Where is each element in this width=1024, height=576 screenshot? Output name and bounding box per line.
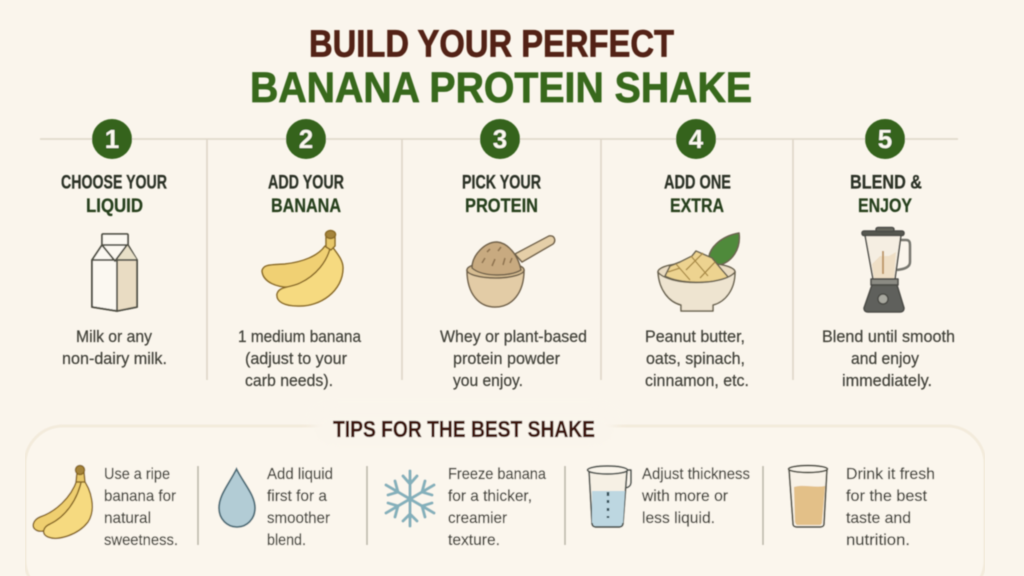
tip 2 text <box>267 466 333 549</box>
step 5 number <box>865 119 905 159</box>
step 1 heading: LIQUID <box>86 195 143 217</box>
title <box>250 24 752 112</box>
step 2 number <box>286 119 326 159</box>
step 3 heading: PROTEIN <box>465 195 538 217</box>
step 2 number: 2 <box>299 124 313 154</box>
title: BANANA PROTEIN SHAKE <box>250 64 752 112</box>
step 4 column <box>645 119 749 390</box>
step 4 heading: ADD ONE <box>664 172 731 194</box>
step 5 heading: BLEND & <box>850 172 922 194</box>
step 1 number: 1 <box>105 124 119 154</box>
step 2 heading: BANANA <box>271 195 341 217</box>
tip 5 text: Drink it fresh <box>846 466 935 483</box>
tip 5 text: nutrition. <box>846 532 910 549</box>
step 3 text: Whey or plant-based <box>440 327 587 346</box>
step 2 text: 1 medium banana <box>238 327 361 346</box>
tip 3 text: Freeze banana <box>448 466 546 483</box>
icon: banana <box>33 466 92 538</box>
tip 3 <box>386 466 546 549</box>
step 1 text: Milk or any <box>76 327 152 346</box>
tip 3 text: texture. <box>448 532 500 549</box>
tip 2 text: blend. <box>267 532 306 549</box>
tips heading: TIPS FOR THE BEST SHAKE <box>333 416 595 442</box>
step 5 text <box>822 327 955 390</box>
icon: blender <box>862 228 910 312</box>
tip 4 <box>588 466 750 527</box>
tip 2 text: first for a <box>267 488 327 505</box>
tip 4 text: Adjust thickness <box>642 466 750 483</box>
step 2 column <box>238 119 361 390</box>
step 5 text: and enjoy <box>851 349 919 368</box>
tip 3 text: for a thicker, <box>448 488 532 505</box>
step 1 text: non-dairy milk. <box>62 349 167 368</box>
step 1 number <box>92 119 132 159</box>
tip 3 text <box>448 466 546 549</box>
tip 2 text: Add liquid <box>267 466 333 483</box>
icon: measuring jug <box>588 466 631 527</box>
tip 3 text: creamier <box>448 510 508 527</box>
step 3 text: you enjoy. <box>453 371 523 390</box>
tips panel outline <box>25 426 985 576</box>
tip 1 text: natural <box>104 510 151 527</box>
step timeline <box>40 139 958 380</box>
tip 1 text: banana for <box>104 488 177 505</box>
title: BUILD YOUR PERFECT <box>309 24 674 66</box>
step 3 column <box>440 119 587 390</box>
icon: bowl with extras and leaf <box>658 233 739 311</box>
step 2 text: carb needs). <box>245 371 333 390</box>
step 5 text: immediately. <box>842 371 932 390</box>
step 5 heading <box>850 172 922 217</box>
icon: milk carton <box>92 234 137 311</box>
step 1 heading <box>61 172 167 217</box>
tip 1 text: sweetness. <box>104 532 178 549</box>
step 3 heading <box>462 172 541 217</box>
step 2 heading: ADD YOUR <box>268 172 344 194</box>
tip 2 <box>219 466 333 549</box>
step 5 number: 5 <box>878 124 892 154</box>
step 3 number: 3 <box>493 124 507 154</box>
step 1 column <box>61 119 167 368</box>
step 1 text <box>62 327 167 368</box>
tip 1 text: Use a ripe <box>104 466 170 483</box>
step 4 text: cinnamon, etc. <box>645 371 749 390</box>
tip 5 text <box>846 466 935 549</box>
tip 5 text: for the best <box>846 488 928 505</box>
tip 1 <box>33 466 178 549</box>
icon: water drop <box>219 469 255 527</box>
tip 1 text <box>104 466 178 549</box>
icon: bananas <box>262 230 343 306</box>
step 5 column <box>822 119 955 390</box>
step 4 number <box>676 119 716 159</box>
step 4 heading: EXTRA <box>670 195 724 217</box>
step 5 heading: ENJOY <box>858 195 912 217</box>
tip 4 text: with more or <box>641 488 729 505</box>
step 5 text: Blend until smooth <box>822 327 955 346</box>
tip 4 text <box>641 466 750 527</box>
step 4 heading <box>664 172 731 217</box>
tip dividers <box>198 466 763 545</box>
step 4 text <box>645 327 749 390</box>
step 1 heading: CHOOSE YOUR <box>61 172 167 194</box>
icon: snowflake <box>386 471 434 526</box>
step 2 text <box>238 327 361 390</box>
step 2 text: (adjust to your <box>245 349 347 368</box>
step 3 text: protein powder <box>453 349 560 368</box>
step 4 text: oats, spinach, <box>646 349 745 368</box>
step 4 text: Peanut butter, <box>645 327 745 346</box>
tip 5 text: taste and <box>846 510 911 527</box>
tip 5 <box>788 466 935 549</box>
step 2 heading <box>268 172 344 217</box>
step 4 number: 4 <box>689 124 704 154</box>
tips heading backdrop <box>312 408 616 448</box>
step 3 number <box>480 119 520 159</box>
tip 2 text: smoother <box>267 510 331 527</box>
step 3 text <box>440 327 587 390</box>
step 3 heading: PICK YOUR <box>462 172 541 194</box>
tip 4 text: less liquid. <box>642 510 715 527</box>
icon: protein scoop <box>467 236 555 307</box>
icon: glass of shake <box>788 466 828 527</box>
